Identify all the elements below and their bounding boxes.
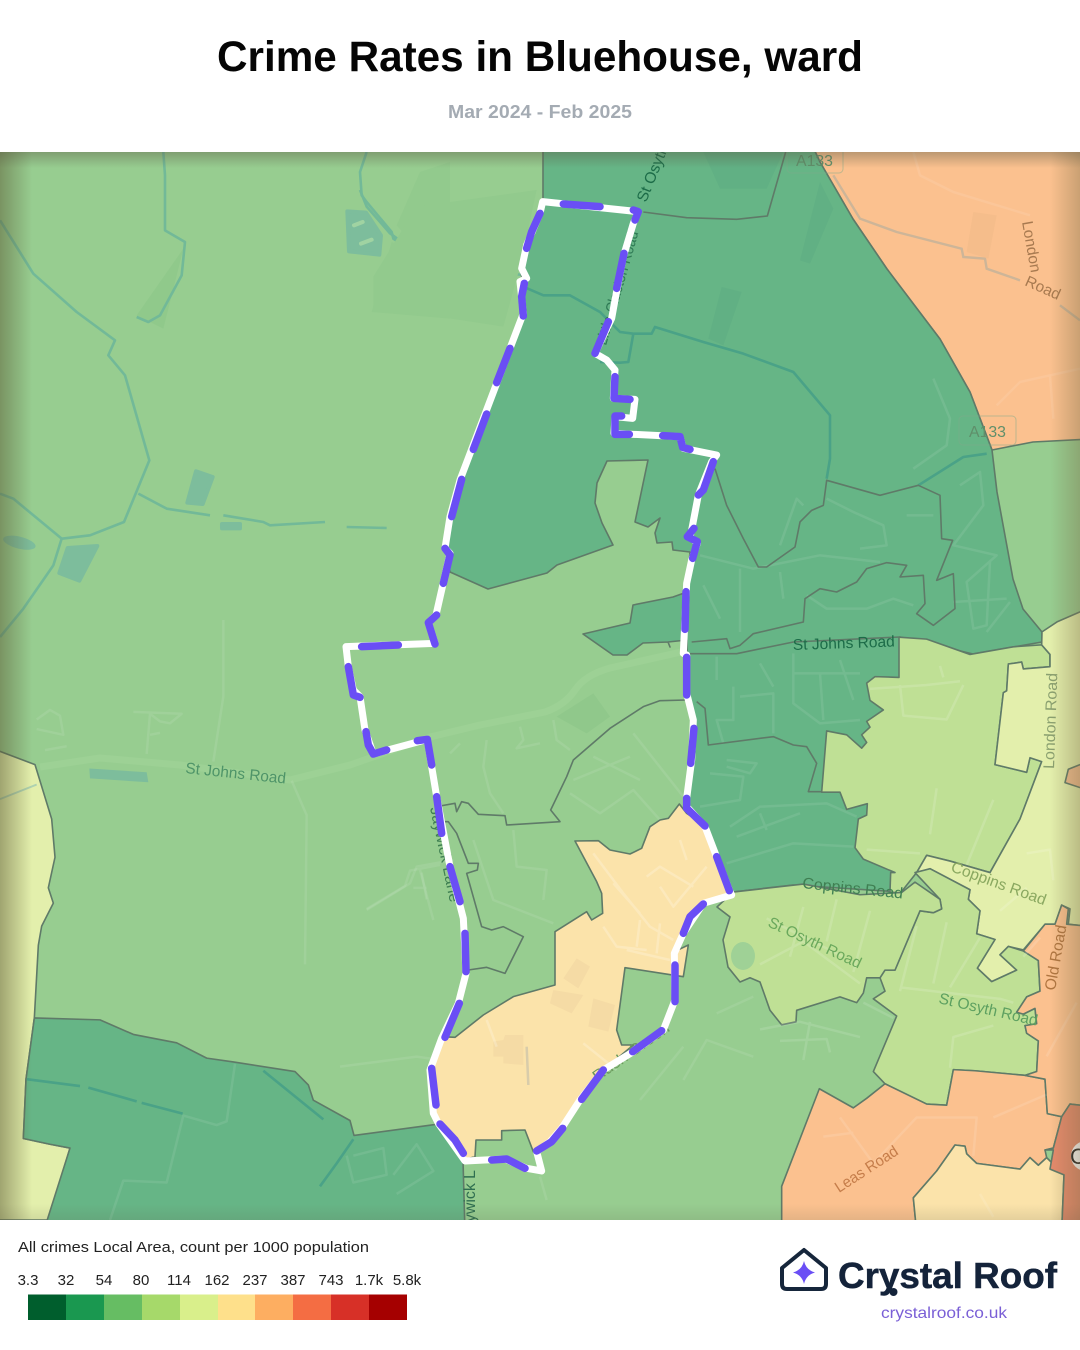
- legend scale labels: 162: [204, 1272, 230, 1289]
- shield: A133 south: [959, 416, 1016, 445]
- east pale region: [917, 609, 1080, 982]
- legend scale labels: 237: [242, 1272, 268, 1289]
- north-east orange area: [812, 145, 1080, 450]
- label: St Johns Road east: St Johns Road: [793, 633, 895, 654]
- map edge vignette: [0, 152, 1080, 1220]
- shield: A133 north: [786, 152, 844, 174]
- St Osyth east green area: [873, 869, 1040, 1105]
- legend colour ramp: [28, 1294, 407, 1320]
- road labels: [185, 142, 1070, 1222]
- label: Coppins Road east: Coppins Road: [949, 859, 1048, 909]
- St Osyth west green area: [717, 882, 942, 1025]
- legend scale labels: 1.7k: [355, 1272, 384, 1289]
- website: crystalroof.co.uk: [881, 1305, 1008, 1322]
- south-east yellow pocket: [912, 1144, 1064, 1220]
- legend scale labels: 743: [318, 1272, 344, 1289]
- ward south-central yellow area: [430, 804, 732, 1160]
- south-west dark green area: [23, 1018, 465, 1232]
- label: Coppins Road west: Coppins Road: [802, 875, 904, 903]
- logo: Crystal Roof: [782, 1250, 1058, 1322]
- label: Leas Road: Leas Road: [832, 1143, 902, 1196]
- legend scale labels: 54: [96, 1272, 112, 1289]
- left pale region: [0, 750, 70, 1220]
- shield: A133 north: A133: [796, 153, 833, 170]
- wordmark: Crystal Roof: [838, 1255, 1058, 1296]
- south-east orange area: [782, 1070, 1062, 1232]
- label: London Road north: London: [1018, 220, 1044, 274]
- label: Rush Green Road: Rush Green: [590, 1020, 673, 1085]
- label: Jaywick Lane: Jaywick Lane: [426, 805, 463, 904]
- ward boundary: white base and purple dashes: [346, 202, 732, 1171]
- legend scale labels: 114: [167, 1272, 191, 1289]
- Old Road orange area: [1017, 905, 1080, 1117]
- label: London Road south: London Road: [1041, 673, 1061, 769]
- label: Jaywick Lane south: ywick L: [462, 1170, 479, 1222]
- label: St Osyth Road east: St Osyth Road: [937, 990, 1039, 1030]
- label: Little Clacton Road: Little Clacton Road: [594, 229, 642, 347]
- east light-green area: [822, 637, 1050, 894]
- subtitle: date range: Mar 2024 - Feb 2025: [448, 101, 632, 122]
- legend: [18, 1240, 422, 1320]
- legend scale labels: 32: [58, 1272, 74, 1289]
- legend title: All crimes Local Area, count per 1000 population: [18, 1240, 369, 1256]
- legend scale labels: 5.8k: [393, 1272, 422, 1289]
- legend scale labels: 3.3: [18, 1272, 38, 1289]
- legend scale labels: 80: [133, 1272, 149, 1289]
- label: Old Road: Old Road: [1042, 924, 1070, 992]
- ward inner light-green boundaries: [440, 700, 687, 973]
- dark green area around ward north and east: [445, 145, 1042, 892]
- red area at south-east edge: [1045, 1104, 1080, 1232]
- label: Road north: Road: [1022, 273, 1063, 304]
- legend scale labels: [18, 1272, 422, 1289]
- label: St Osyth north: St Osyth: [634, 142, 672, 204]
- label: St Johns Road west: St Johns Road: [185, 760, 287, 788]
- icon: house with star: [782, 1250, 826, 1289]
- label: St Osyth Road west: St Osyth Road: [765, 914, 864, 972]
- shield: A133 south: A133: [969, 424, 1006, 441]
- title: Crime Rates in Bluehouse, ward: [217, 33, 863, 81]
- legend scale labels: 387: [280, 1272, 306, 1289]
